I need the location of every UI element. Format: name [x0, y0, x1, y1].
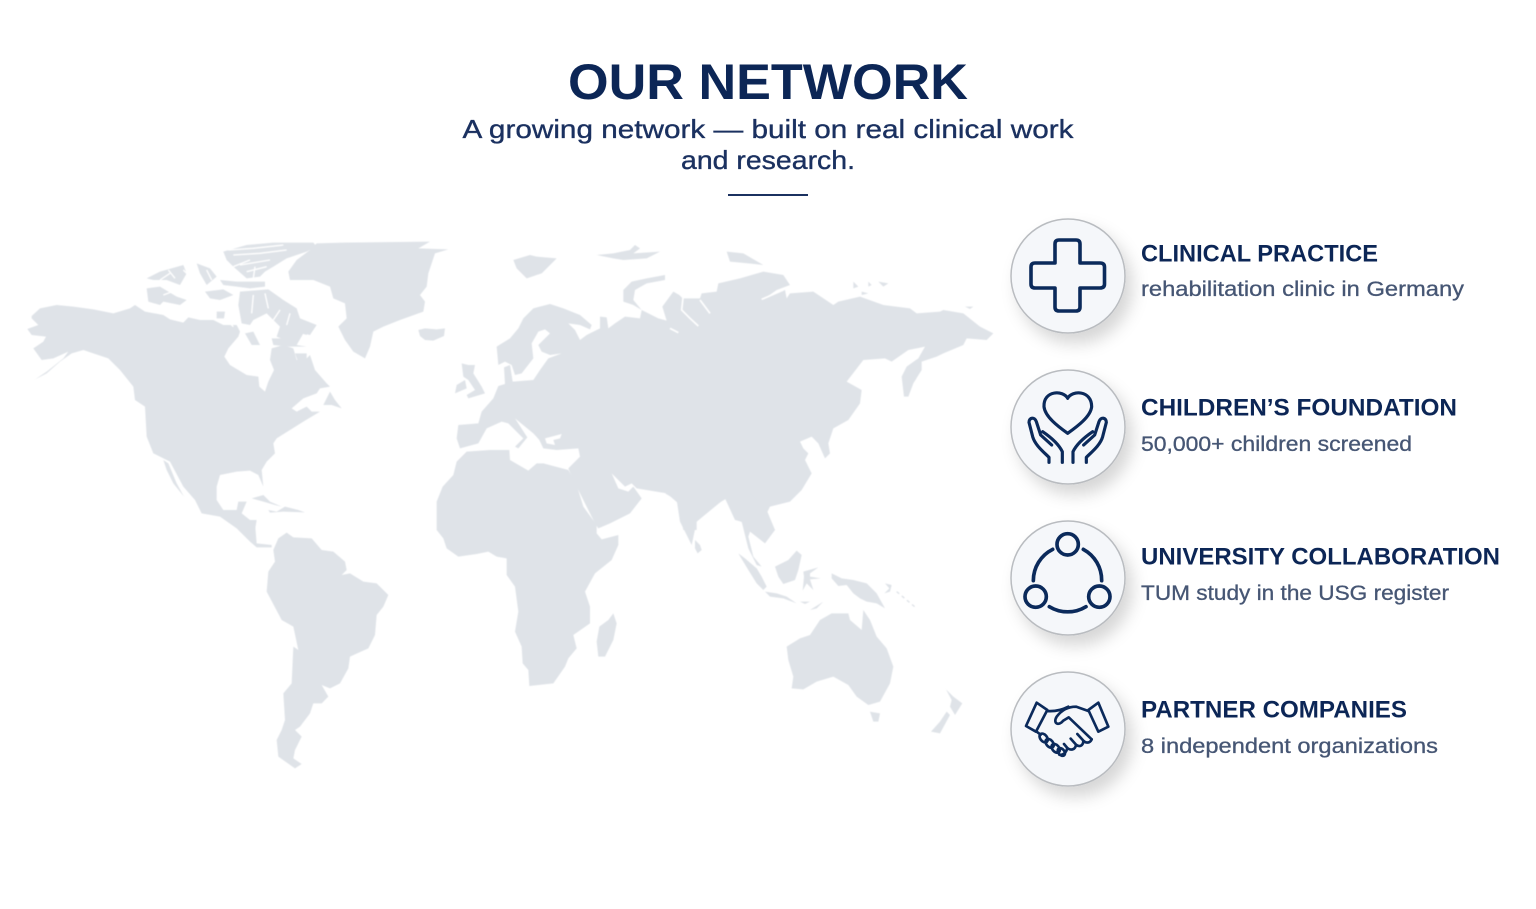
description: 8 independent organizations	[1141, 735, 1438, 758]
subtitle: A growing network — built on real clinical work	[462, 114, 1075, 144]
map: sulawesi	[803, 567, 821, 591]
map: eurasia	[457, 245, 993, 532]
map: africa	[437, 450, 618, 686]
world map	[27, 242, 993, 768]
map: india and indochina	[665, 487, 775, 567]
subtitle	[462, 114, 1075, 175]
icon: heart in hands	[1029, 393, 1106, 462]
heading: PARTNER COMPANIES	[1141, 696, 1407, 724]
heading: CLINICAL PRACTICE	[1141, 240, 1378, 268]
heading: CHILDREN’S FOUNDATION	[1141, 394, 1457, 422]
black sea	[545, 434, 562, 445]
map: franz josef land	[597, 245, 660, 260]
title: OUR NETWORK	[568, 54, 968, 110]
description: rehabilitation clinic in Germany	[1141, 278, 1465, 301]
siberian coast cracks	[670, 290, 783, 333]
map: south america	[267, 533, 388, 768]
description: TUM study in the USG register	[1141, 582, 1449, 605]
map: greenland	[288, 242, 448, 358]
map: central america	[237, 520, 272, 547]
description: 50,000+ children screened	[1141, 433, 1412, 456]
map: tasmania	[870, 712, 880, 722]
panel: clinical practice	[1011, 219, 1465, 333]
panel: university collaboration	[1011, 521, 1500, 635]
map: new siberian islands	[853, 282, 973, 309]
map: madagascar	[597, 613, 617, 657]
map: new zealand	[931, 689, 962, 733]
map: australia	[787, 610, 893, 705]
subtitle: and research.	[681, 145, 855, 175]
map: newfoundland	[323, 392, 342, 408]
map: solomon islands	[884, 583, 892, 593]
icon: medical cross	[1031, 240, 1104, 311]
map: africa and south america	[237, 450, 618, 768]
map: caribbean	[252, 495, 305, 513]
icon: handshake	[1026, 703, 1108, 757]
map: svalbard	[513, 255, 557, 278]
map: severnaya zemlya	[727, 252, 763, 265]
map: sumatra and java	[738, 553, 823, 610]
panel: partner companies	[1011, 672, 1438, 786]
heading: UNIVERSITY COLLABORATION	[1141, 544, 1500, 570]
map: south-east asia and oceania	[665, 487, 962, 733]
map: new guinea	[832, 573, 885, 608]
icon: connected circles	[1025, 534, 1110, 612]
map: north america and greenland	[27, 242, 485, 530]
panel: children's foundation	[1011, 370, 1457, 484]
map: iceland	[418, 328, 445, 341]
arctic cracks	[160, 245, 290, 327]
map: borneo	[775, 551, 802, 584]
map: canadian arctic	[223, 243, 317, 278]
map: britain and ireland	[462, 363, 485, 398]
